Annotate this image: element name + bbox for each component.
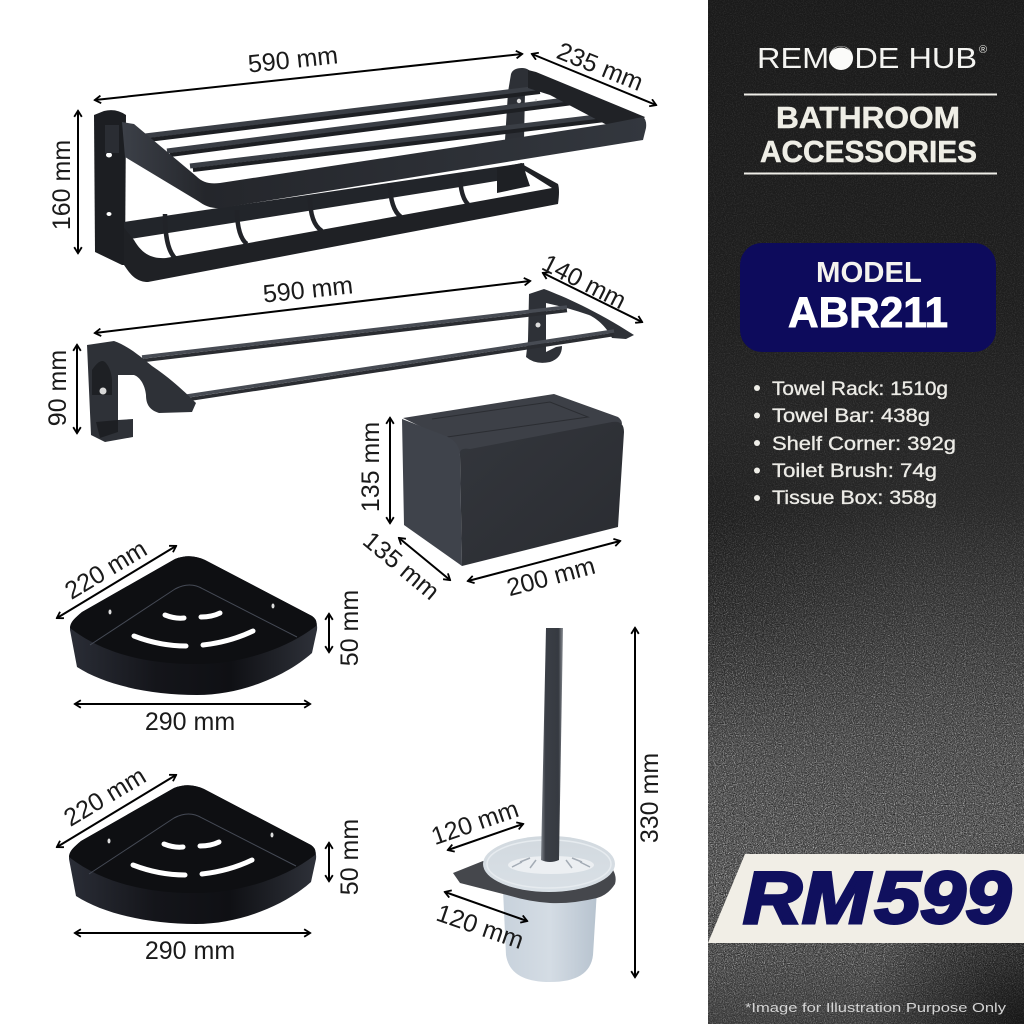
dimension: bar width: 590 mm bbox=[262, 271, 354, 309]
brush dish bbox=[483, 836, 615, 892]
panel: dark sidebar bbox=[708, 0, 1024, 1024]
list: component weights: Tissue Box: 358g bbox=[772, 488, 937, 509]
brush holder plate bbox=[453, 861, 616, 903]
logo: Remode Hub: ® bbox=[979, 44, 987, 56]
dimension: rack depth bbox=[532, 37, 656, 105]
dimension: bottom shelf width: 290 mm bbox=[145, 937, 235, 965]
dimension: box width bbox=[468, 541, 620, 602]
rack hooks bbox=[165, 173, 470, 258]
heading: bathroom accessories: ACCESSORIES bbox=[760, 134, 977, 169]
product: toilet brush bbox=[453, 628, 616, 982]
logo: Remode Hub: REMODE HUB bbox=[757, 43, 977, 75]
dimension: rack width: 590 mm bbox=[247, 41, 339, 79]
dimension: bar depth: 140 mm bbox=[537, 249, 631, 315]
product: towel rack bbox=[94, 68, 646, 282]
dimension: top shelf side: 220 mm bbox=[60, 535, 152, 605]
dimension: bottom shelf height: 50 mm bbox=[336, 819, 364, 895]
dimension: rack depth: 235 mm bbox=[553, 37, 647, 97]
list: component weights: Shelf Corner: 392g bbox=[772, 434, 956, 455]
dimension: box width: 200 mm bbox=[504, 552, 598, 602]
panel: model badge bbox=[740, 243, 996, 352]
dimension: brush upper depth: 120 mm bbox=[428, 795, 522, 851]
dimension: bottom shelf side bbox=[57, 762, 176, 847]
bar left bracket bbox=[87, 341, 196, 442]
dimension: top shelf width: 290 mm bbox=[145, 708, 235, 736]
dimension: rack height: 160 mm bbox=[48, 140, 76, 230]
dimension: brush lower depth: 120 mm bbox=[433, 899, 527, 955]
dimension: top shelf height: 50 mm bbox=[336, 590, 364, 666]
list: component weights: Toilet Brush: 74g bbox=[772, 461, 937, 482]
dimension: bar height: 90 mm bbox=[44, 350, 72, 426]
bar rails bbox=[142, 307, 614, 400]
panel: model badge: ABR211 bbox=[788, 289, 948, 337]
price banner: RM599 bbox=[743, 858, 1011, 939]
brush bristles bbox=[508, 856, 594, 874]
brush glass cup bbox=[503, 890, 597, 982]
bar right bracket bbox=[526, 289, 634, 363]
rack upper frame bbox=[122, 117, 646, 208]
product: corner shelf top bbox=[70, 556, 317, 695]
rack lower back plate bbox=[124, 163, 526, 240]
dimension: box depth: 135 mm bbox=[357, 526, 445, 606]
rack right arm bbox=[528, 70, 645, 125]
rack wall bracket bbox=[94, 110, 126, 265]
rack lower rail bbox=[124, 163, 559, 282]
brush handle bbox=[541, 628, 563, 862]
footnote: *Image for Illustration Purpose Only bbox=[745, 1000, 1007, 1015]
dimension: rack width bbox=[95, 41, 522, 100]
product: tissue box bbox=[402, 394, 624, 566]
rack rear post bbox=[505, 68, 533, 140]
dimension: bar width bbox=[95, 271, 530, 333]
dimension: brush height: 330 mm bbox=[636, 753, 664, 843]
product: towel bar bbox=[87, 289, 634, 442]
rack bars bbox=[145, 88, 605, 170]
list: component weights: Towel Bar: 438g bbox=[772, 406, 930, 427]
dimension: box height: 135 mm bbox=[357, 422, 385, 512]
heading: bathroom accessories: BATHROOM bbox=[776, 100, 960, 135]
list: component weights bbox=[754, 379, 956, 509]
dimension: bottom shelf side: 220 mm bbox=[59, 762, 151, 832]
product: corner shelf bottom bbox=[69, 785, 316, 924]
panel: model badge: MODEL bbox=[816, 257, 922, 289]
dimension: top shelf side bbox=[57, 535, 176, 618]
heading: bathroom accessories bbox=[744, 94, 997, 174]
list: component weights: Towel Rack: 1510g bbox=[772, 379, 948, 400]
